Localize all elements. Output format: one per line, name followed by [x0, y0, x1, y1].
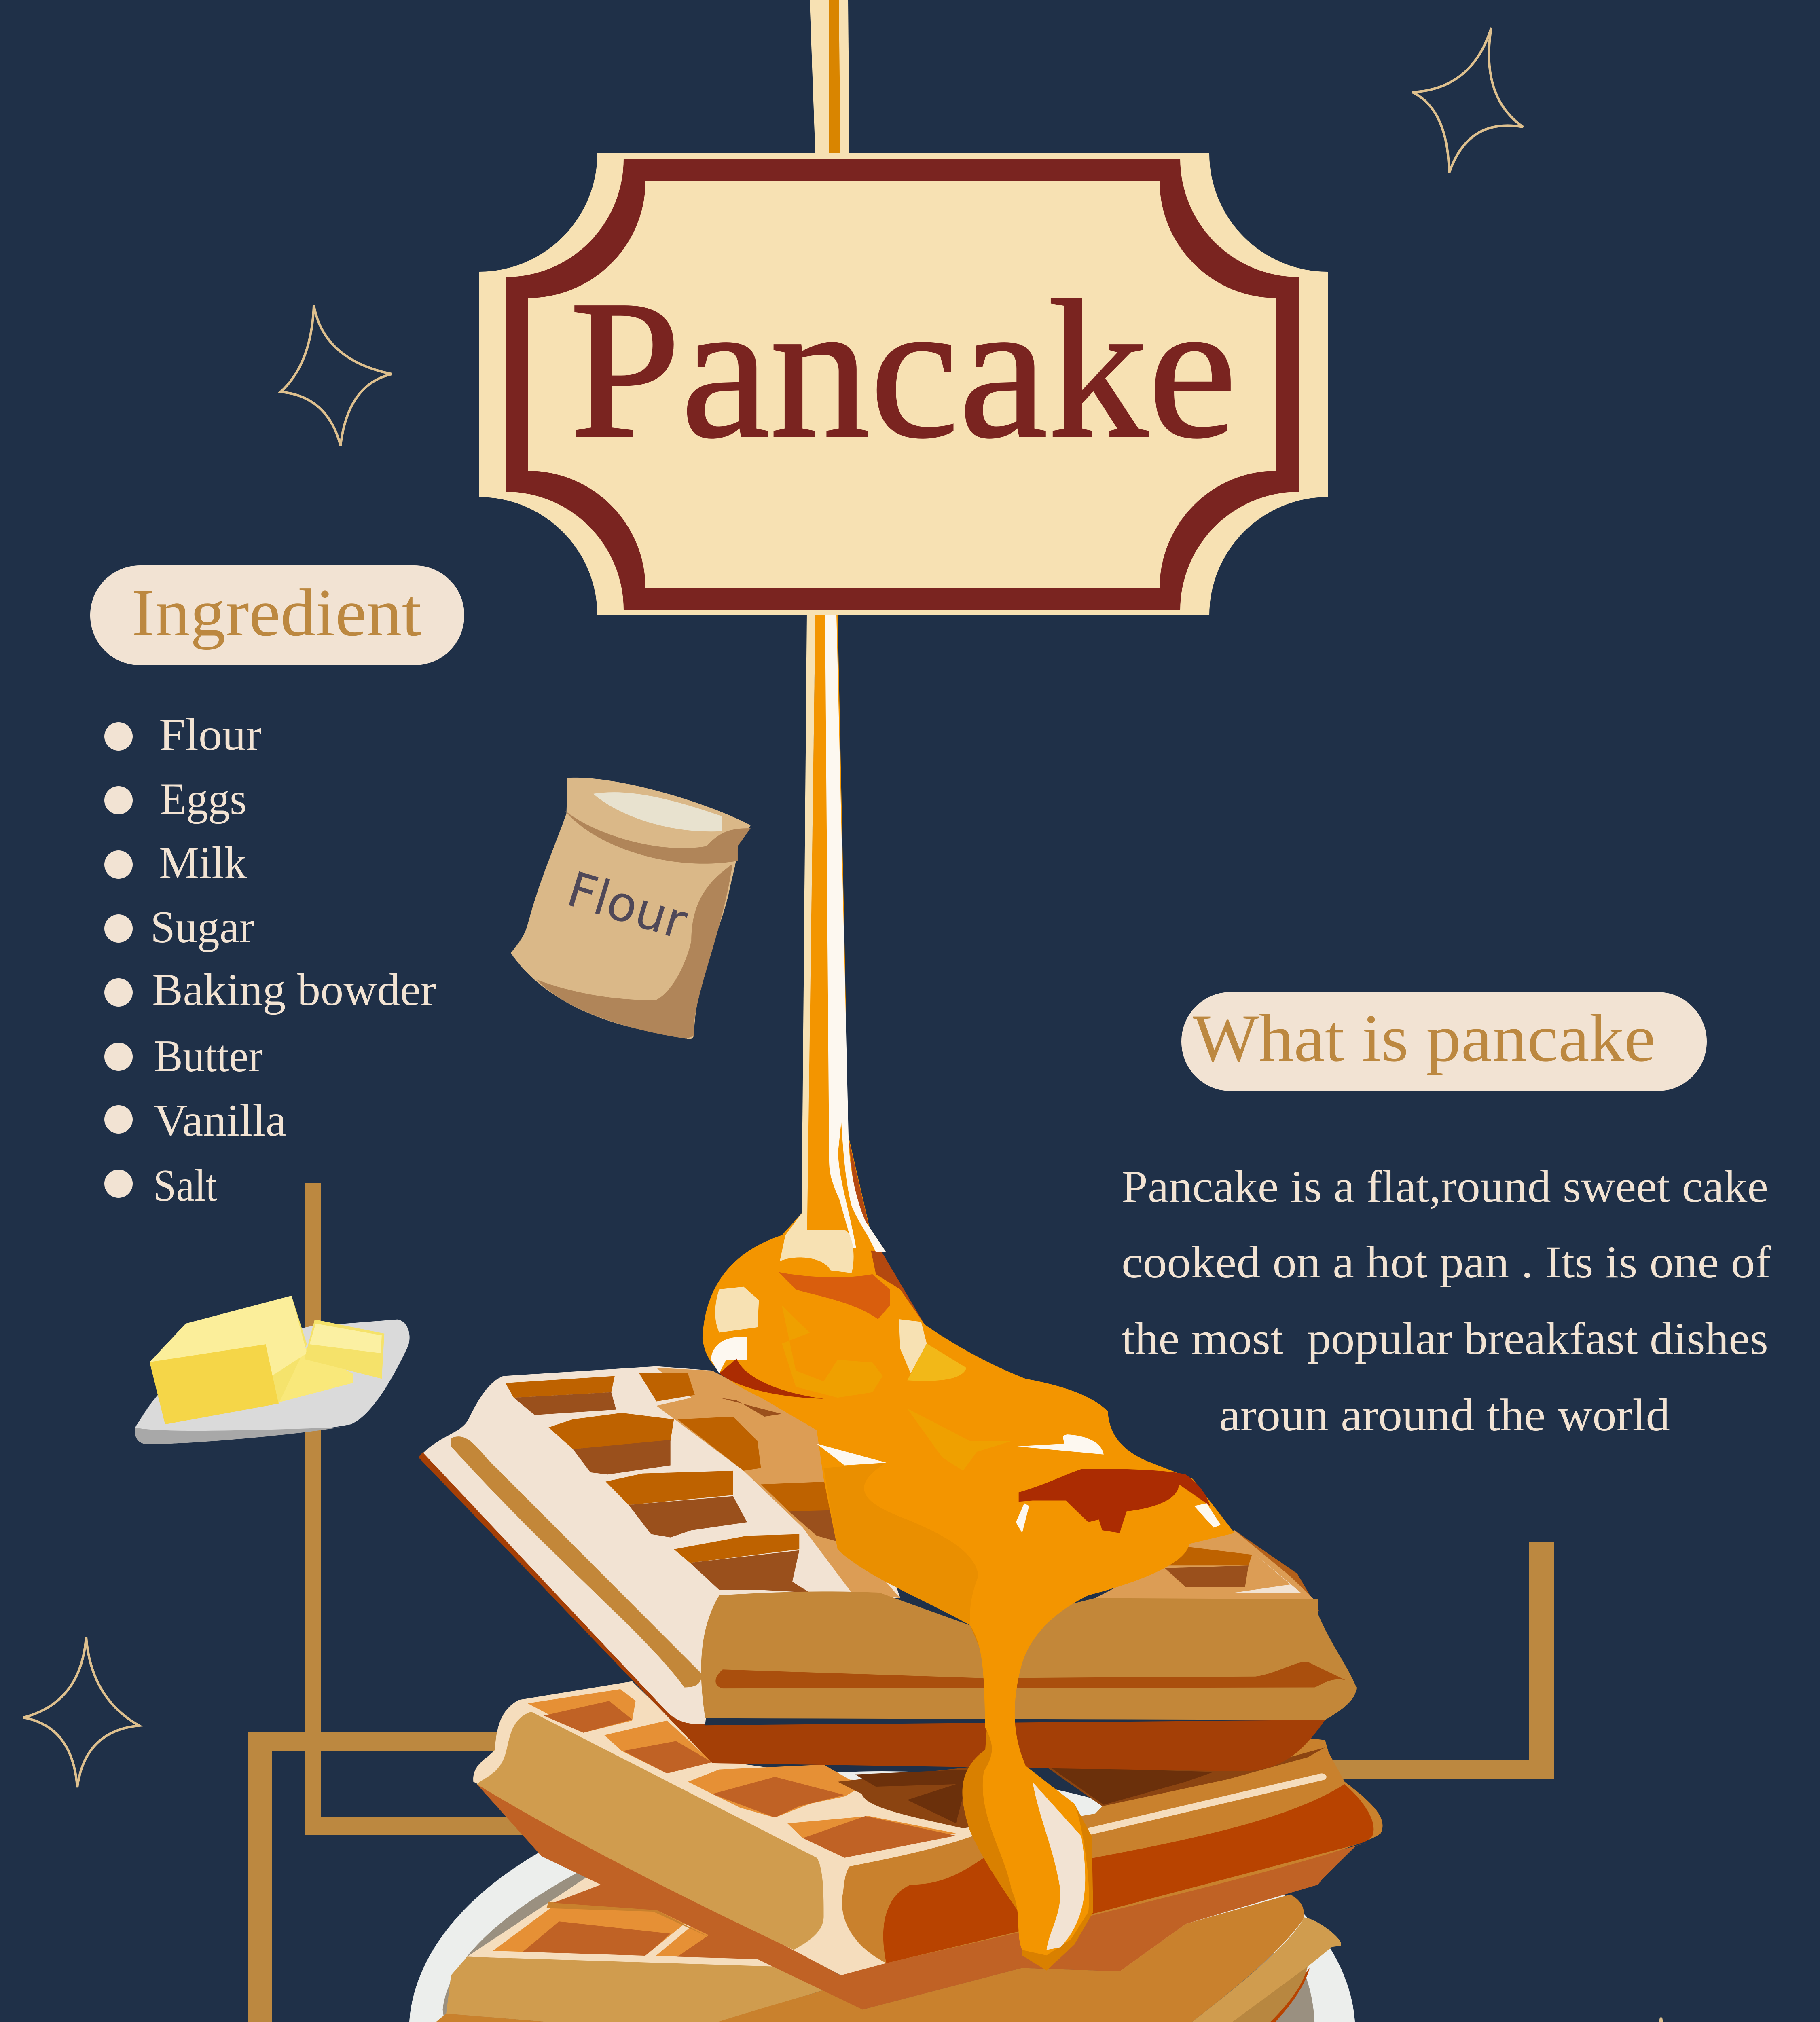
ingredient items: Salt — [153, 1161, 217, 1211]
ingredient items: Eggs — [160, 774, 247, 824]
ingredient items: Flour — [159, 710, 262, 760]
panel: what is pancake — [1122, 992, 1771, 1440]
ingredient items: Milk — [159, 838, 247, 888]
plate — [407, 1771, 1357, 2022]
description text: cooked on a hot pan . Its is one of — [1122, 1237, 1771, 1288]
description text: Pancake is a flat,round sweet cake — [1122, 1161, 1768, 1212]
icon: flour sack: Flour — [561, 861, 694, 951]
title sign — [479, 153, 1328, 615]
syrup pour over waffles — [703, 613, 1234, 1971]
waffle: top — [418, 1366, 1357, 1771]
icon: butter — [135, 1296, 410, 1444]
heading: what is pancake: What is pancake — [1193, 1001, 1655, 1076]
heading: ingredient: Ingredient — [131, 575, 421, 650]
ingredient items: Baking bowder — [152, 965, 436, 1015]
icon: flour sack — [511, 778, 751, 1039]
bullets — [104, 722, 133, 1198]
ingredient items — [150, 710, 436, 1211]
ingredient items: Sugar — [150, 902, 254, 952]
syrup stream above sign — [810, 0, 849, 156]
panel: ingredient list — [90, 565, 464, 1211]
description text: the most popular breakfast dishes — [1122, 1313, 1768, 1364]
waffle: bottom — [409, 1872, 1341, 2022]
ingredient items: Vanilla — [154, 1096, 286, 1146]
title: Pancake — [569, 259, 1237, 479]
ingredient items: Butter — [154, 1031, 263, 1081]
waffle: middle — [473, 1681, 1382, 2009]
description text — [1122, 1161, 1771, 1440]
connector lines — [248, 1183, 1583, 2022]
description text: aroun around the world — [1219, 1390, 1670, 1440]
